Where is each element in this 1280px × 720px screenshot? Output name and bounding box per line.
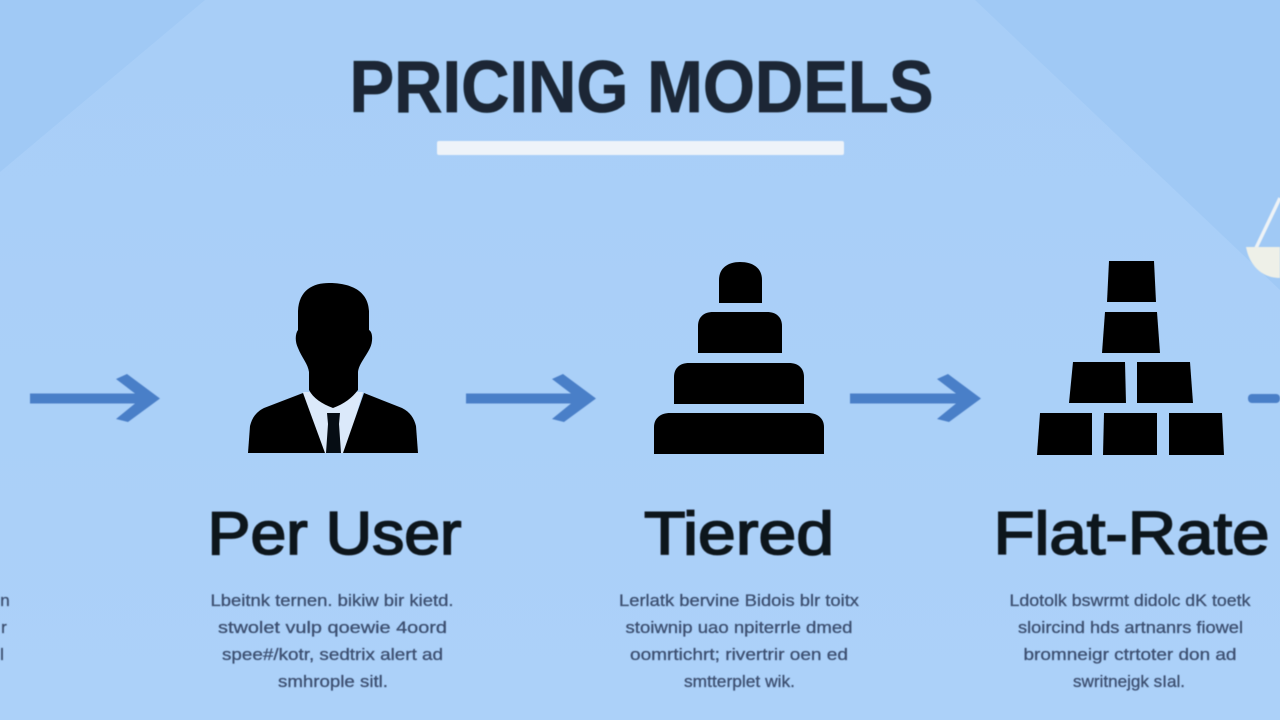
label: Tiered: Tiered: [644, 500, 834, 567]
description: Flat-Rate: Ldotolk bswrmt didolc dK toetk: [1010, 591, 1251, 610]
cropped text from left column: n: [0, 591, 10, 610]
description: Per User: stwolet vulp qoewie 4oord: [218, 618, 447, 637]
description: Flat-Rate: bromneigr ctrtoter don ad: [1024, 645, 1236, 664]
title underline: [437, 141, 844, 155]
description: Tiered: stoiwnip uao npiterrle dmed: [626, 618, 852, 637]
description: Tiered: Lerlatk bervine Bidois blr toitx: [619, 591, 860, 610]
label: Per User: Per User: [208, 500, 462, 567]
description: Tiered: smtterplet wik.: [684, 672, 795, 691]
description: Flat-Rate: swritnejgk sIal.: [1073, 672, 1185, 691]
description: Per User: smhrople sitl.: [278, 672, 388, 691]
icon: balance scale cropped: [1246, 198, 1280, 278]
description: Flat-Rate: [1010, 591, 1251, 691]
icon: person in suit: [248, 283, 418, 453]
icon: tiered stack: [654, 262, 824, 454]
cropped text from left column: l: [0, 645, 4, 664]
cropped text from left column: [0, 591, 10, 664]
description: Per User: Lbeitnk ternen. bikiw bir kietd.: [210, 591, 454, 610]
cropped text from left column: r: [1, 618, 7, 637]
title: PRICING MODELS: [350, 47, 934, 128]
arrow 3: [850, 374, 981, 422]
description: Flat-Rate: sloircind hds artnanrs fiowel: [1018, 618, 1243, 637]
description: Per User: [210, 591, 454, 691]
arrow 2: [466, 374, 596, 422]
description: Per User: spee#/kotr, sedtrix alert ad: [222, 645, 443, 664]
description: Tiered: [619, 591, 860, 691]
arrow 4 cropped: [1248, 394, 1280, 403]
arrow 1: [30, 374, 160, 422]
icon: flat-rate blocks: [1037, 261, 1224, 455]
description: Tiered: oomrtichrt; rivertrir oen ed: [630, 645, 848, 664]
label: Flat-Rate: Flat-Rate: [994, 500, 1270, 567]
